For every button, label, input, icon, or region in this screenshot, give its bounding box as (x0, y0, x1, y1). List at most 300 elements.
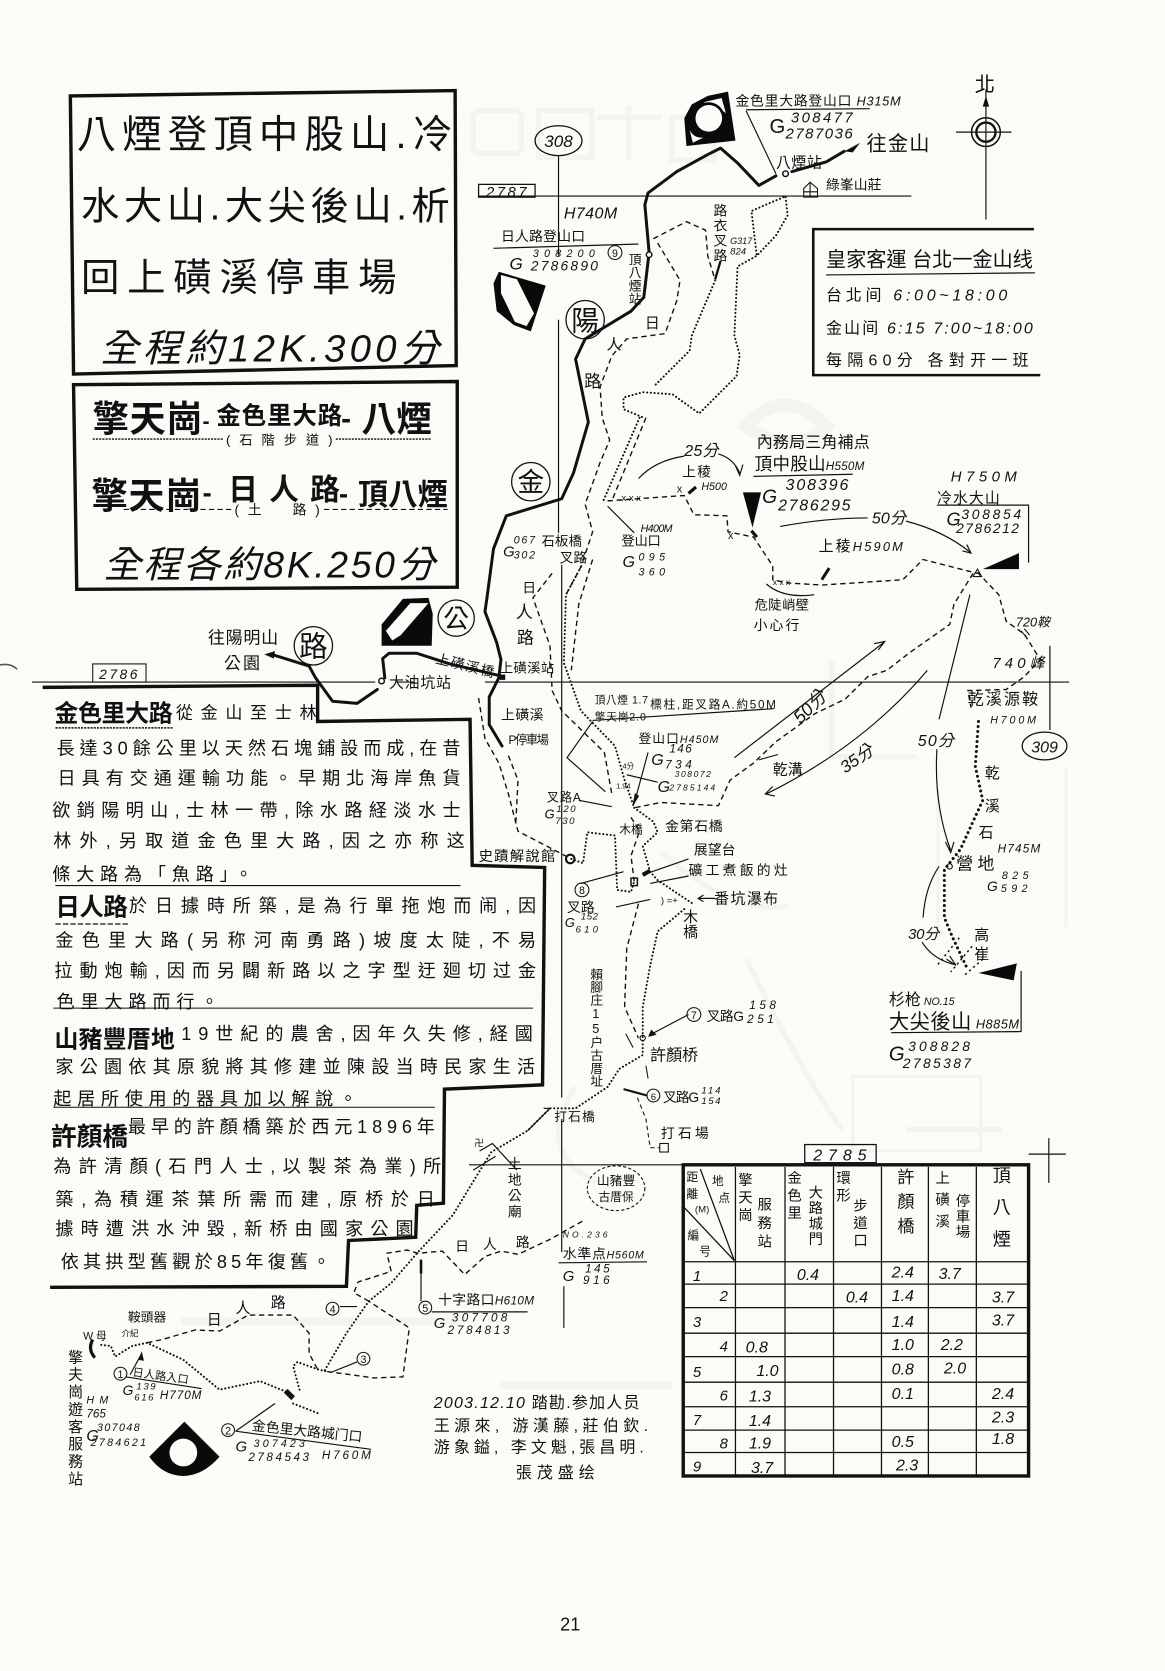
label: 上稜 H500: x (728, 530, 734, 542)
table values: 0.5 (892, 1434, 914, 1451)
label: 頂中股山 summit: 308396 (786, 477, 849, 494)
label: 石板橋叉路: 石板橋 (541, 534, 582, 549)
text block: 金色里大路: 從金山至士林 (176, 703, 317, 722)
heading: 日人路: 日人路 (55, 893, 128, 921)
label: waypoint 5: 2784813 (447, 1324, 510, 1337)
table values: 2.0 (943, 1361, 966, 1378)
survey credits note: 王源來, 游漢藤,莊伯欽. (434, 1417, 648, 1435)
route two: - (339, 478, 348, 509)
label: waypoint 1: 139 (136, 1382, 156, 1393)
label: 石板橋叉路: 叉路 (560, 550, 587, 566)
grid label 2786 (93, 664, 146, 682)
road label 日人路 lower: 人 (483, 1236, 497, 1252)
label: 上稜 H500: 上稜 (682, 463, 711, 479)
table values: 2.3 (895, 1458, 918, 1475)
table values (746, 1265, 1015, 1477)
label: 木橋 and stone bridge (619, 818, 723, 836)
route title line 3: 回上磺溪停車場 (81, 257, 397, 300)
label: waypoint 2: 金色里大路城门口 (251, 1417, 363, 1445)
text block: 金色里大路: 條大路為「魚路」。 (52, 864, 253, 884)
label: 上稜 H590 (819, 538, 903, 580)
label: 登山口 H450: 146 (669, 742, 692, 755)
label: 賴腳庄 old house: 賴腳庄15户古厝址 (588, 968, 603, 1087)
table values: 1.3 (749, 1388, 771, 1405)
bus times: 金山间 6:15 7:00~18:00 (826, 320, 1033, 338)
road label 日人路 bottom: 人 (236, 1300, 251, 1317)
route one: 金色里大路 (216, 402, 343, 430)
icon: 公 circle (438, 600, 474, 636)
label: 山豬豐古厝: 古厝保 (598, 1190, 634, 1204)
bus times: 台北间 6:00~18:00 (826, 287, 1007, 305)
road label 日人路: 路 (584, 372, 601, 391)
label: 日人路登山口: 2786890 (530, 258, 598, 274)
table values: 0.8 (892, 1362, 914, 1379)
label: 金色里大路登山口: 308477 (791, 110, 853, 127)
label: 冷水大山 summit: 冷水大山 (937, 490, 1000, 507)
table values: 0.8 (746, 1339, 768, 1356)
text block: 日人路: 金色里大路(另称河南勇路)坡度太陡,不易 (55, 930, 536, 950)
table header corner: (M) (695, 1205, 709, 1216)
table values: 1.0 (892, 1337, 914, 1354)
label: 番坑瀑布: 番坑瀑布 (714, 891, 778, 908)
label: 上磺溪 parking (501, 706, 549, 747)
label: 路標 coordinates (616, 761, 715, 796)
text block: 許顏橋: 為許清顏(石門人士,以製茶為業)所 (53, 1156, 441, 1176)
icon: north compass (956, 74, 1012, 220)
table row numbers: 2 (719, 1288, 729, 1305)
label: waypoint 1: 616 (134, 1392, 154, 1403)
arrow: 50 minutes down (918, 595, 970, 853)
label: 登山口 H450: 登山口H450M (638, 731, 719, 746)
table column headers: 上磺溪 (933, 1170, 949, 1236)
table values: 1.4 (892, 1314, 914, 1331)
arrow: 30 minutes: 30分 (908, 926, 941, 943)
text block: 許顏橋 (51, 1117, 441, 1272)
label: waypoint 2: G (236, 1438, 247, 1455)
table row numbers: 9 (693, 1459, 701, 1476)
icon: bottom fan marker (149, 1422, 220, 1476)
route two: - (203, 477, 212, 508)
table header corner: 距 (686, 1171, 698, 1184)
label: 大尖後山 summit (889, 963, 1021, 1071)
grid label 308: 308 (544, 132, 573, 151)
table values: 0.4 (846, 1289, 868, 1306)
label: to Yangmingshan park: 往陽明山 (208, 629, 278, 648)
label: 擎天崗遊客服務站: HM (86, 1395, 114, 1407)
label: waypoint 7 (648, 999, 776, 1037)
label: steep cliff warning: x x x (773, 577, 791, 587)
label: steep cliff warning: 危陡峭壁 (755, 598, 809, 613)
label: 登山口 H400: 360 (638, 566, 665, 578)
label: 木橋 and stone bridge: 金第石橋 (665, 818, 723, 834)
road label 日人路 (516, 315, 660, 648)
grid lines (32, 156, 1069, 1328)
table row numbers: 6 (720, 1387, 729, 1404)
label: waypoint 7: 7 (691, 1010, 697, 1022)
survey credits note: 游象鎰, 李文魁,張昌明. (434, 1439, 644, 1457)
label: 乾溝: 乾溝 (773, 762, 803, 779)
label: 上磺溪 parking: P停車場 (508, 732, 549, 747)
table column headers: 頂八煙 (991, 1166, 1011, 1262)
label: 石板橋叉路: G (503, 543, 515, 560)
label: 乾溪石 (978, 765, 1000, 842)
label: 鞍頭器 (83, 1309, 166, 1343)
table values: 0.4 (797, 1267, 819, 1284)
label: 打石場: 打石場 (661, 1125, 709, 1141)
heading: 許顏橋: 許顏橋 (51, 1124, 128, 1152)
label: 登山口 H450: 734 (665, 758, 692, 771)
label: 720 saddle: 720鞍 (1016, 615, 1052, 630)
survey credits note: 2003.12.10 踏勘.参加人员 (433, 1394, 640, 1412)
label: 大尖後山 summit: 308828 (908, 1038, 970, 1054)
label: 許顏桥: 許顏桥 (650, 1046, 698, 1064)
icon: hexagon marker (382, 598, 433, 646)
label: junction 路衣叉路: 路衣叉路 (711, 204, 727, 263)
label: to Yangmingshan park (208, 629, 278, 673)
label: benchmark 水準点: 水準点H560M (563, 1246, 644, 1262)
table header corner: 離 (686, 1187, 698, 1201)
label: waypoint 8: 610 (576, 924, 599, 935)
label: waypoint 5: G (434, 1315, 445, 1332)
grid label 309 (1022, 732, 1067, 760)
label: 金色里大路登山口: 金色里大路登山口 H315M (735, 93, 901, 109)
label: junction 路衣叉路: 824 (730, 247, 746, 258)
arrow: 50 minutes and 35 minutes along the valley (734, 642, 927, 796)
label: 許顏桥 (626, 1034, 698, 1078)
table values: 1.9 (749, 1435, 771, 1452)
label: 乾溪源鞍: H700M (990, 715, 1036, 727)
icon: shield marker (493, 272, 546, 331)
table row numbers: 7 (693, 1412, 702, 1429)
road label 日人路 lower: 路 (516, 1234, 530, 1250)
label: 番坑瀑布: ) =+ (661, 896, 678, 907)
label: 大尖後山 summit: 大尖後山 H885M (889, 1010, 1019, 1033)
grid label 309: 309 (1031, 739, 1058, 756)
label: 日人路登山口: 日人路登山口 (501, 228, 585, 244)
label: 上磺溪橋: 上磺溪橋 (434, 650, 496, 680)
label: waypoint 6: 叉路G (663, 1089, 699, 1105)
text block: 金色里大路 (52, 699, 465, 884)
icon: north compass: 北 (975, 74, 995, 97)
table values: 2.4 (991, 1386, 1014, 1403)
label: 乾溪源鞍: 乾溪源鞍 (968, 690, 1038, 708)
label: 冷水大山 summit: 2786212 (955, 520, 1019, 536)
panel: stepped text panel outline (43, 685, 545, 1287)
icon: 路 circle: 路 (299, 631, 328, 663)
icon: 金 circle (512, 463, 550, 501)
table column headers: 停車場 (953, 1193, 970, 1240)
label: 登山口 H450 (633, 731, 719, 805)
road label 日人路: 日 (645, 315, 660, 332)
route two: 擎天崗 (92, 475, 201, 516)
label: waypoint 1: H770M (160, 1389, 202, 1402)
label: waypoint 6: 154 (701, 1096, 721, 1107)
label: waypoint 3: 3 (361, 1354, 367, 1366)
panel: bus schedule (813, 229, 1040, 375)
grid label 2785 (805, 1145, 876, 1165)
arrow: 50 minutes and 35 minutes along the valley: 50分 (789, 685, 832, 727)
label: 日人路登山口: H740M (564, 205, 618, 222)
label: 登山口 H400: G (622, 554, 635, 571)
grid label 2787: 2787 (485, 184, 527, 201)
label: waypoint 6: 114 (701, 1085, 721, 1096)
text block: 金色里大路: 林外,另取道金色里大路,因之亦称这 (53, 831, 465, 851)
road label 日人路: 人 (516, 603, 533, 622)
label: 路標 coordinates: 2785144 (668, 783, 715, 793)
label: benchmark 水準点: G (563, 1268, 574, 1285)
text block: 日人路: 色里大路而行。 (56, 992, 219, 1012)
label: 擎天崗遊客服務站: G (86, 1428, 99, 1445)
label: waypoint 4 (326, 1302, 357, 1316)
text block: 山豬豐厝地 (53, 1024, 535, 1109)
text block: 山豬豐厝地: 19世紀的農舍,因年久失修,経國 (181, 1024, 533, 1044)
route two: 頂八煙 (358, 479, 448, 512)
text block: 日人路: 於日據時所築,是為行單拖炮而闹,因 (129, 896, 536, 916)
table column headers: 服務站 (755, 1197, 771, 1253)
arrow: 50 minutes to 冷水大山 (780, 509, 971, 553)
label: camp site: 592 (1001, 883, 1028, 895)
road label 日人路 bottom: 日 (207, 1312, 222, 1329)
grid label 308 (535, 126, 582, 156)
text block: 金色里大路: 欲銷陽明山,士林一帶,除水路経淡水士 (52, 800, 460, 820)
label: 綠峯山莊: 綠峯山莊 (826, 177, 882, 193)
label: Bayan station: 八煙站 (776, 154, 822, 171)
label: 擎天崗遊客服務站: 擎夫崗遊客服務站 (66, 1349, 83, 1488)
label: 金色里大路登山口: G (770, 116, 785, 138)
label: waypoint 8 (565, 872, 624, 935)
label: benchmark 水準点: 145 (585, 1262, 610, 1275)
text block: 許顏橋: 據時遭洪水沖毀,新桥由國家公園 (55, 1219, 414, 1239)
heading: 金色里大路: 金色里大路 (54, 699, 173, 727)
grid label 2785: 2785 (812, 1148, 867, 1165)
label: waypoint 5: 十字路口H610M (438, 1291, 534, 1307)
label: 大尖後山 summit: 2785387 (902, 1055, 972, 1071)
label: steep cliff warning (754, 577, 814, 633)
label: 路標 coordinates: 308072 (675, 769, 711, 779)
label: 鞍頭器: 介紀 (122, 1328, 139, 1338)
text block: 金色里大路: 長達30餘公里以天然石塊鋪設而成,在昔 (56, 739, 460, 759)
label: 大尖後山 summit: G (889, 1043, 905, 1065)
label: camp site (947, 843, 1041, 895)
table header corner: 号 (699, 1245, 711, 1258)
route two (92, 474, 448, 518)
label: 登山口 H450: G (651, 752, 664, 769)
label: waypoint 4: 4 (330, 1304, 336, 1316)
label: 番坑瀑布 (616, 891, 778, 908)
label: 乾溪石: 乾 (985, 765, 1000, 782)
table header corner: 編 (687, 1229, 699, 1242)
table values: 0.1 (892, 1386, 914, 1403)
label: benchmark 水準点 (559, 1229, 647, 1287)
label: waypoint 1: G (123, 1382, 134, 1398)
label: 山豬豐古厝: 山豬豐 (597, 1173, 635, 1188)
label: waypoint 2 (222, 1404, 371, 1464)
label: 金色里大路登山口: 2787036 (785, 126, 853, 143)
label: benchmark 水準点: NO.236 (563, 1229, 608, 1239)
text block: 金色里大路: 日具有交通運輸功能。早期北海岸魚貨 (58, 768, 460, 788)
label: 金色里大路登山口 (735, 93, 901, 174)
label: 鞍頭器: W母 (83, 1331, 107, 1343)
text block: 許顏橋: 最早的許顏橋築於西元1896年 (128, 1117, 435, 1137)
label: 乾溝 (759, 755, 803, 779)
table row numbers: 5 (693, 1364, 702, 1381)
label: 土地公廟: 卍 (474, 1139, 484, 1150)
survey credits note (433, 1394, 648, 1482)
label: 頂中股山 summit: 內務局三角補点 (757, 434, 870, 452)
route one: (石階步道) (226, 432, 333, 447)
road label 日人路 bottom (207, 1295, 286, 1329)
table values: 2.2 (940, 1337, 963, 1354)
label: 木橋 and stone bridge: 木橋 (619, 822, 643, 836)
label: 頂中股山 summit: G (762, 487, 777, 508)
route two: (土 路) (234, 502, 320, 518)
label: 大油坑站: 大油坑站 (389, 674, 451, 691)
label: junction 路衣叉路: G317 (730, 236, 753, 246)
table column headers: 擎天崗 (736, 1172, 752, 1225)
label: 大尖後山 summit: 杉枪 NO.15 (889, 991, 955, 1009)
label: 綠峯山莊 (804, 177, 882, 197)
route title line 2: 水大山.大尖後山.析 (81, 186, 450, 229)
label: waypoint 7: 叉路G (707, 1008, 744, 1024)
label: 擎天崗遊客服務站: 765 (86, 1407, 106, 1420)
text block: 許顏橋: 依其拱型舊觀於85年復舊。 (61, 1252, 330, 1272)
table values: 1.0 (756, 1363, 779, 1380)
label: 頂中股山 summit (743, 434, 870, 528)
label: waypoint 6: 6 (651, 1092, 656, 1103)
label: 日人路登山口: G (509, 255, 523, 274)
label: 720 saddle (1016, 615, 1052, 637)
route total distance: 全程約12K.300分 (100, 327, 443, 370)
label: 上稜 H590: 上稜H590M (819, 538, 903, 555)
label: 冷水大山 summit: H750M (951, 469, 1017, 486)
label: 擎天崗遊客服務站: 307048 (97, 1422, 140, 1434)
label: waypoint 7: 251 (746, 1013, 774, 1026)
icon: 陽 circle (566, 301, 604, 339)
label: waypoint 2: 307423 (254, 1438, 305, 1450)
label: 打石橋: 打石橋 (554, 1109, 595, 1124)
icon: top fan marker (684, 92, 735, 146)
table row numbers (693, 1268, 729, 1476)
bus times: 每隔60分 各對开一班 (826, 352, 1029, 370)
table values: 3.7 (751, 1460, 774, 1477)
trails: dashed and dotted (91, 197, 1040, 1413)
label: 上磺溪 parking: 上磺溪 (501, 706, 544, 722)
label: waypoint 3 (330, 1352, 370, 1373)
label: 上稜 H500 (621, 463, 757, 542)
label: 上磺溪站: 上磺溪站 (500, 660, 554, 675)
label: 土地公廟: 土地公廟 (506, 1156, 522, 1220)
label: 叉路 A: 叉路A (547, 789, 582, 804)
label: to Jinshan: 往金山 (867, 132, 929, 155)
label: 冷水大山 summit: 308854 (961, 506, 1021, 522)
label: waypoint 8: 8 (579, 885, 585, 897)
label: 叉路 A (545, 789, 612, 827)
route one: 八煙 (361, 401, 432, 440)
table values: 1.4 (749, 1413, 771, 1430)
road label 日人路: 路 (517, 629, 534, 648)
arrow: 50 minutes to 冷水大山: 50分 (872, 509, 908, 527)
road label 日人路: 日 (522, 580, 536, 596)
label: 日人路登山口 (493, 205, 638, 274)
label: 石板橋叉路: 067 (514, 535, 536, 547)
label: 頂八煙 marker post: 頂八煙 1.7 (595, 694, 648, 706)
label: waypoint 5: 307708 (452, 1311, 508, 1324)
label: 展望台: 礦工煮飯的灶 (689, 862, 788, 878)
label: waypoint 8: 152 (581, 912, 599, 923)
label: 頂中股山 summit: 2786295 (777, 497, 851, 514)
label: junction 路衣叉路 (711, 204, 753, 279)
label: 上稜 H500: H500 (701, 481, 727, 493)
label: waypoint 7: 158 (749, 999, 776, 1012)
icon: 路 circle (294, 627, 333, 665)
label: 上稜 H500: x (677, 483, 683, 495)
label: camp site: 營地 (956, 855, 994, 874)
route one: - (341, 402, 351, 435)
table values: 3.7 (992, 1313, 1015, 1330)
label: 叉路 A: G (545, 806, 555, 821)
label: 登山口 H400 (608, 506, 673, 578)
label: 乾溪石: 溪 (985, 798, 1000, 815)
label: 頂中股山 summit: 頂中股山H550M (755, 454, 865, 474)
label: 登山口 H400: 登山口 (621, 534, 661, 549)
arrow: 30 minutes (908, 866, 956, 966)
route one: 擎天崗 (93, 399, 203, 440)
label: camp site: H745M (998, 843, 1041, 856)
route one: - (203, 409, 210, 433)
label: waypoint 8: G (565, 915, 575, 930)
label: to Yangmingshan park: 公園 (224, 654, 260, 673)
table column headers: 步道口 (851, 1197, 867, 1251)
label: 冷水大山 summit: G (946, 509, 961, 529)
label: 冷水大山 summit (937, 469, 1029, 577)
label: vertical 木橋: 木橋 (681, 909, 698, 939)
table row numbers: 1 (693, 1268, 701, 1285)
table row numbers: 4 (720, 1338, 728, 1355)
label: 打石橋 (528, 1108, 595, 1131)
label: waypoint 1: 日人路入口 (132, 1365, 190, 1387)
arrow: 50 minutes and 35 minutes along the valley: 35分 (837, 740, 879, 777)
label: 日人路登山口: 308200 (533, 248, 595, 260)
label: waypoint 2: 2784543 (247, 1451, 310, 1464)
label: waypoint 5 (419, 1260, 534, 1337)
label: 史蹟解說館: 史蹟解說館 (479, 848, 555, 865)
label: 路標 coordinates: 4分 (622, 761, 635, 770)
table column headers: 金色里 (785, 1170, 801, 1223)
route two: 日人路 (228, 474, 340, 507)
label: 石板橋叉路: 302 (514, 549, 535, 561)
label: 山豬豐古厝 (587, 1166, 645, 1211)
text block: 日人路: 拉動炮輸,因而另闢新路以之字型迂廻切过金 (54, 961, 536, 981)
table values: 2.3 (991, 1410, 1014, 1427)
panel: route title (70, 91, 456, 374)
label: waypoint 2: H760M (322, 1449, 371, 1462)
label: camp site: 825 (1002, 870, 1029, 882)
road label 日人路: 人 (606, 337, 621, 354)
text block: 山豬豐厝地: 家公園依其原貌將其修建並陳設当時民家生活 (55, 1057, 535, 1077)
label: 上稜 H500: x x x (621, 493, 641, 504)
label: waypoint 5: 5 (422, 1303, 428, 1315)
main road (264, 143, 860, 746)
table row numbers: 3 (693, 1314, 702, 1331)
label: 路標 coordinates: 1.94 (616, 782, 631, 791)
label: 擎天崗遊客服務站 (66, 1349, 146, 1488)
label: 打石場 (637, 1098, 709, 1152)
label: 高崔 (974, 927, 989, 963)
arrow: 50 minutes down: 50分 (918, 732, 956, 750)
label: waypoint 1 (114, 1351, 202, 1403)
table header corner: 地 (712, 1175, 724, 1188)
label: 鞍頭器: 鞍頭器 (128, 1309, 166, 1324)
